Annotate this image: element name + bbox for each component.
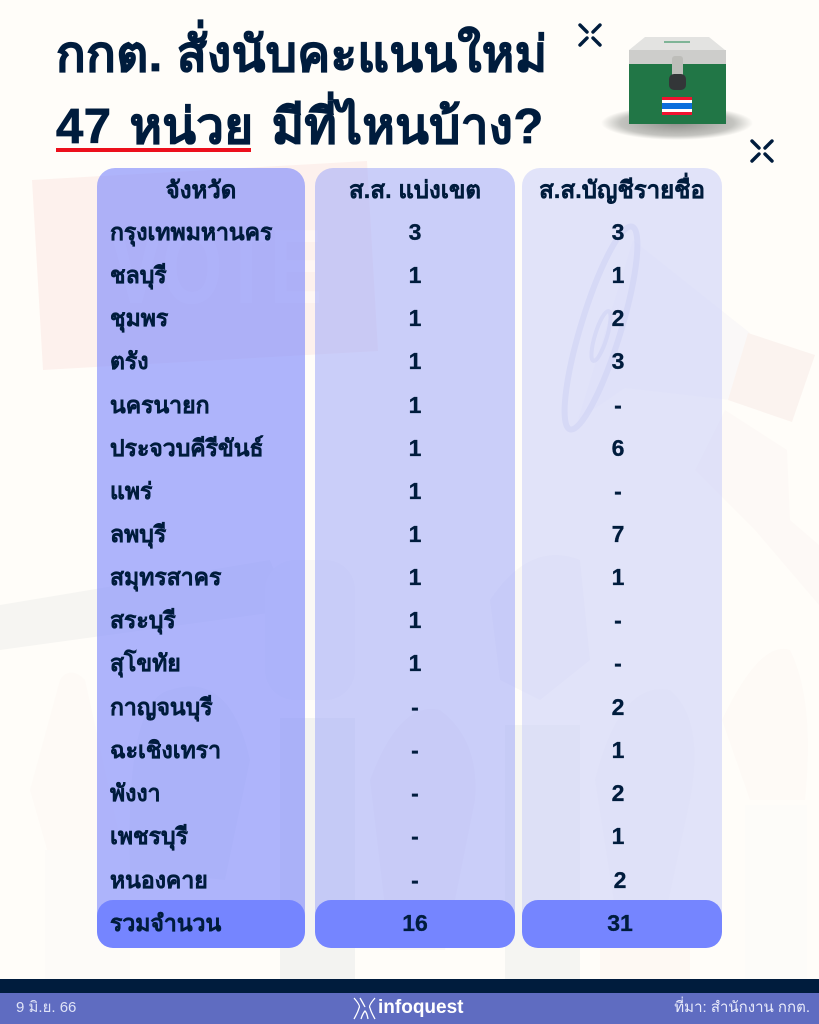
red underline [56, 148, 251, 152]
raised hands [0, 555, 808, 980]
table text: 1 [612, 262, 624, 288]
table text: 1 [612, 564, 624, 590]
table text: พังงา [110, 780, 161, 806]
table text: 1 [409, 262, 421, 288]
table text: - [614, 650, 622, 676]
table text: 1 [409, 650, 421, 676]
table text: ลพบุรี [110, 521, 166, 547]
table text: 2 [612, 305, 624, 331]
table text: 1 [409, 521, 421, 547]
table text: - [411, 867, 419, 893]
table text: ฉะเชิงเทรา [110, 737, 221, 763]
table text: 3 [612, 348, 624, 374]
icon: sparkle bottom [750, 139, 774, 163]
table text: 1 [409, 348, 421, 374]
table text: เพชรบุรี [110, 823, 188, 849]
total label: รวมจำนวน [110, 910, 221, 936]
table text: 3 [612, 219, 624, 245]
total party list: 31 [607, 910, 633, 936]
table text: - [614, 478, 622, 504]
table text: - [411, 780, 419, 806]
title line 2: 47 หน่วย มีที่ไหนบ้าง? [56, 100, 544, 154]
table text: 2 [612, 694, 624, 720]
table text: 1 [409, 435, 421, 461]
panel: province column [97, 168, 305, 948]
vote sign [32, 161, 378, 370]
table text: 1 [409, 478, 421, 504]
navy strip [0, 979, 819, 993]
table text: 2 [612, 780, 624, 806]
table text: กรุงเทพมหานคร [110, 219, 272, 245]
header: party list: ส.ส.บัญชีรายชื่อ [539, 177, 705, 204]
table text: สระบุรี [110, 607, 176, 633]
total row background: party list [522, 900, 722, 948]
table text: สุโขทัย [110, 650, 181, 676]
table text: - [614, 607, 622, 633]
total row background: province [97, 900, 305, 948]
title [56, 19, 548, 154]
icon: ballot box [604, 37, 750, 140]
table text: 1 [409, 607, 421, 633]
title line 1: กกต. สั่งนับคะแนนใหม่ [56, 28, 548, 82]
header: constituency: ส.ส. แบ่งเขต [349, 177, 481, 204]
source: ที่มา: สำนักงาน กกต. [674, 999, 810, 1016]
table text: ประจวบคีรีขันธ์ [110, 435, 264, 461]
table text: - [411, 737, 419, 763]
table text: 1 [409, 392, 421, 418]
table text: แพร่ [110, 478, 152, 504]
table text: - [411, 823, 419, 849]
header: province: จังหวัด [166, 177, 236, 204]
megaphone [551, 221, 819, 605]
table text: - [614, 392, 622, 418]
panel: party list column [522, 168, 722, 948]
table text: กาญจนบุรี [110, 694, 213, 720]
table text: สมุทรสาคร [110, 564, 221, 590]
table text: ชุมพร [110, 305, 168, 331]
table text: 2 [614, 867, 626, 893]
total row background: constituency [315, 900, 515, 948]
icon: infoquest logo [354, 998, 376, 1020]
table text: ชลบุรี [110, 262, 167, 288]
logo wordmark: infoquest [378, 997, 464, 1018]
table text: 1 [612, 737, 624, 763]
table text: 7 [612, 521, 624, 547]
total constituency: 16 [402, 910, 428, 936]
table text: 6 [612, 435, 624, 461]
panel: constituency column [315, 168, 515, 948]
table text: 1 [612, 823, 624, 849]
table text: นครนายก [110, 392, 210, 418]
table text: 3 [409, 219, 421, 245]
table text: 1 [409, 564, 421, 590]
date: 9 มิ.ย. 66 [16, 999, 76, 1016]
table text: หนองคาย [110, 867, 208, 893]
icon: sparkle top [578, 23, 602, 47]
vote sign: VOTE [110, 208, 322, 326]
table text: - [411, 694, 419, 720]
table text: ตรัง [110, 348, 149, 374]
footer band [0, 979, 819, 1024]
table text: 1 [409, 305, 421, 331]
